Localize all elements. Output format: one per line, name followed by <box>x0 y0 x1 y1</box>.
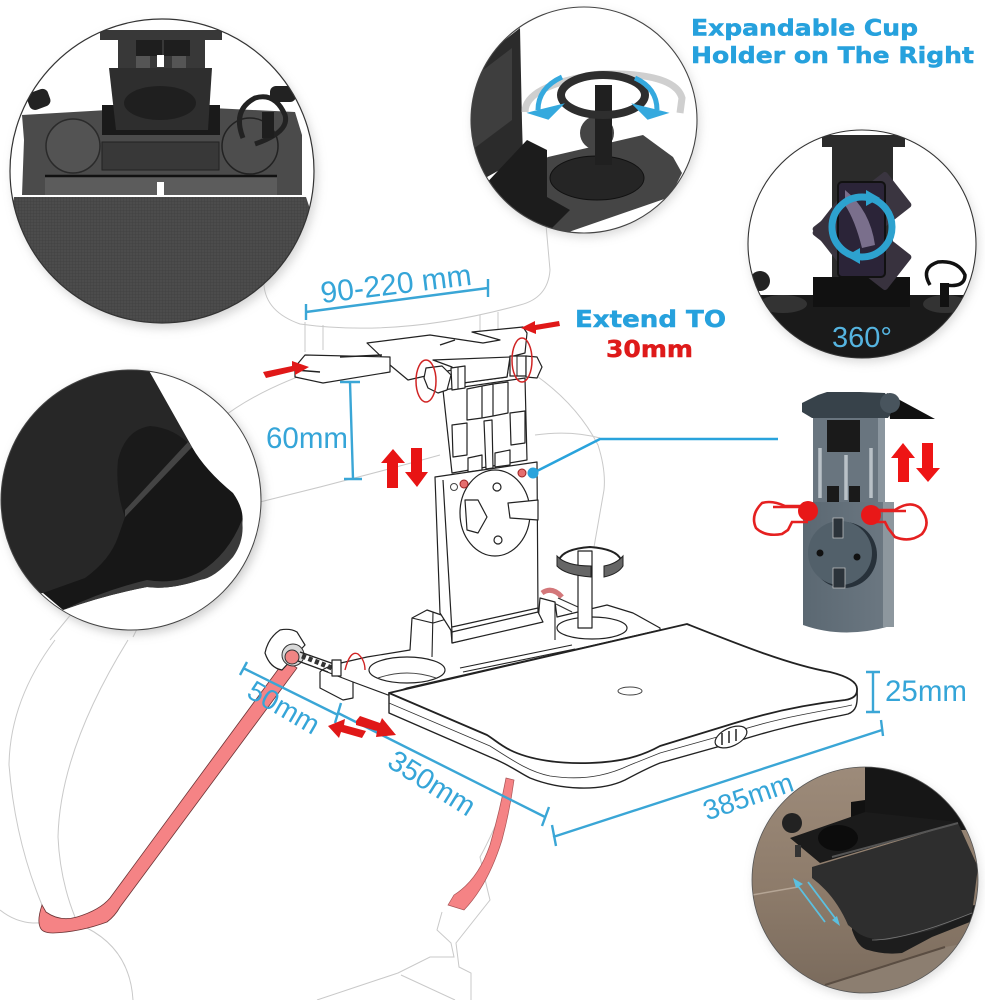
callout: Extend to 30mm: 30mm <box>606 337 693 363</box>
phone mount <box>100 30 222 68</box>
dimension: 90-220 mm: 90-220 mm <box>319 259 473 310</box>
heading: expandable cup holder: Holder on The Right <box>691 44 975 69</box>
dimension: 50mm: 50mm <box>242 675 325 740</box>
panel: tray sliding photo circle <box>752 765 985 1000</box>
cup holder right <box>222 118 278 174</box>
dimension: 25mm: 25mm <box>885 675 967 708</box>
dimension: 385mm: 385mm <box>699 767 797 826</box>
red arrow: left clamp <box>263 361 309 378</box>
strap anchor knob <box>265 629 334 672</box>
label: 360 degrees: 360° <box>832 322 892 354</box>
expandable ring <box>239 97 286 144</box>
bracket: lower plate with mounting disk <box>435 462 543 643</box>
mesh tray surface <box>10 197 312 330</box>
panel: soft tray edge circle <box>0 360 264 634</box>
black ring <box>561 75 645 115</box>
cup holder left <box>46 119 100 173</box>
expandable ring on stem <box>557 547 623 628</box>
right hand press icon <box>861 504 927 539</box>
clip and flip arrow <box>332 653 365 676</box>
strap: left pink belt <box>39 660 297 933</box>
dimension: 350mm: 350mm <box>382 745 481 823</box>
blue rotation arrows <box>538 77 657 110</box>
panel: 360 degree rotation circle <box>745 130 985 365</box>
panel: tray back view circle <box>10 19 317 330</box>
main sheet <box>0 360 192 600</box>
heading: expandable cup holder: Expandable Cup <box>691 16 918 42</box>
rotation arrows <box>832 190 892 264</box>
dimension: 385mm <box>552 720 883 846</box>
dimension: 25mm <box>866 672 967 712</box>
panel: expandable cup holder circle <box>460 7 699 240</box>
panel: height adjust detail <box>754 392 940 632</box>
dimension: 60mm: 60mm <box>266 422 348 455</box>
left hand press icon <box>754 501 818 535</box>
dimension: 350mm <box>335 703 549 826</box>
cup ring <box>926 262 965 286</box>
phones <box>811 171 913 263</box>
dark plate <box>790 812 941 863</box>
mesh tray top <box>812 823 978 940</box>
side latch <box>712 722 750 752</box>
callout: Extend to 30mm: Extend TO <box>575 307 726 333</box>
tray base and cup holders <box>265 590 660 700</box>
blue slide arrows <box>793 878 840 926</box>
rotating disk <box>811 522 877 588</box>
right cup hole <box>557 617 627 639</box>
mounting disk <box>460 470 530 556</box>
bracket: upper clamp <box>263 321 560 383</box>
right strap anchor <box>542 590 578 612</box>
red arrows <box>891 443 940 482</box>
knob left <box>416 360 465 402</box>
red arrows up and down <box>381 448 428 488</box>
left cup hole <box>369 657 445 683</box>
cup hole <box>550 156 644 200</box>
red release buttons <box>460 480 468 488</box>
lower tray body <box>43 447 243 610</box>
expanded ring ghost <box>525 74 682 113</box>
dimension: 60mm <box>266 382 362 479</box>
heading: expandable cup holder <box>691 16 975 69</box>
tray: main table top <box>389 624 857 788</box>
red slide arrows <box>328 716 396 738</box>
seat outline <box>0 150 604 1000</box>
label: blue callout line <box>528 439 778 478</box>
callout: Extend to 30mm <box>575 307 726 363</box>
knobs <box>28 88 50 110</box>
peeled flap <box>117 426 192 517</box>
red arrow: right clamp <box>521 321 560 334</box>
mesh tray rim <box>852 905 975 954</box>
center hole <box>618 687 642 695</box>
knob right <box>510 338 542 382</box>
strap: right pink belt <box>448 778 514 910</box>
bracket: sliding upper plate <box>443 378 527 473</box>
